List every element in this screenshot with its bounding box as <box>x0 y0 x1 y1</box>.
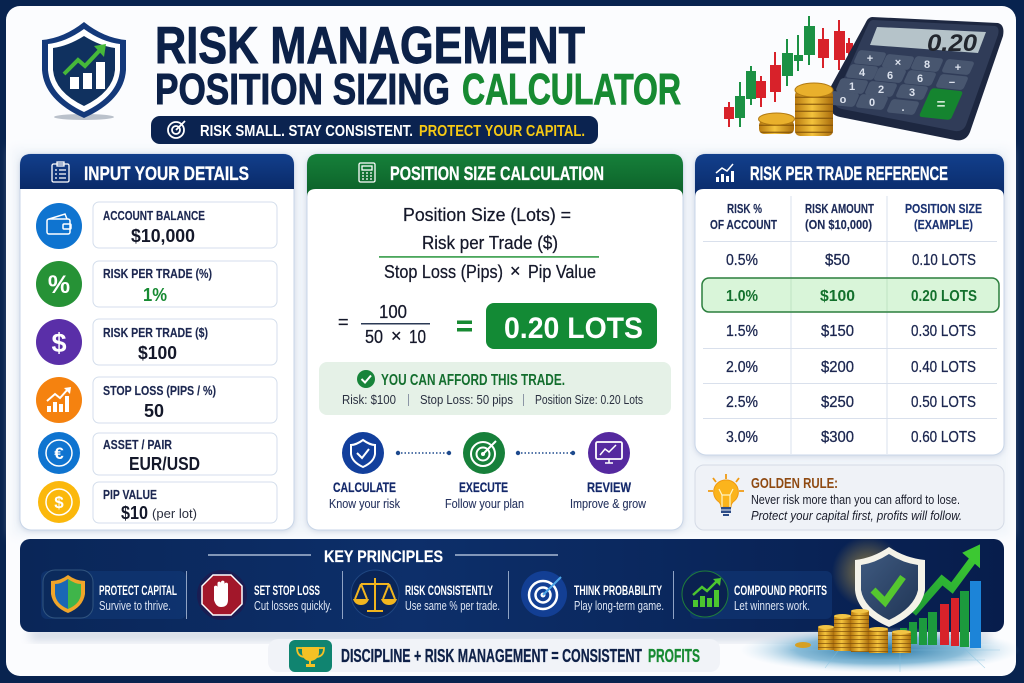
callout: affordability: YOU CAN AFFORD THIS TRADE. <box>381 372 565 389</box>
calculator key labels: 6 <box>887 70 893 82</box>
row: 0.5%: $50 <box>825 252 850 269</box>
row: 1.5%: $150 <box>821 323 854 340</box>
illustration: calculator <box>826 17 1003 140</box>
footer banner <box>268 639 720 672</box>
table header: (ON $10,000) <box>805 217 872 232</box>
panel header <box>20 154 294 189</box>
title: RISK MANAGEMENT <box>155 17 585 75</box>
row: 3.0%: $300 <box>821 429 854 446</box>
field: pip value: (per lot) <box>152 506 197 521</box>
panel: input your details <box>20 154 294 530</box>
worked calculation: = <box>338 312 349 332</box>
header logo: shield with growth chart <box>42 22 126 120</box>
row: 1.0% highlighted: 0.20 LOTS <box>911 288 977 305</box>
calculator key labels: = <box>937 96 946 113</box>
formula: Pip Value <box>528 262 596 282</box>
step: calculate: Know your risk <box>329 497 401 511</box>
panel: risk per trade reference <box>695 154 1004 455</box>
field: asset pair: € <box>54 444 64 463</box>
principle: protect capital: Survive to thrive. <box>99 598 171 613</box>
field: risk dollars: $ <box>51 328 67 358</box>
calculator keys <box>826 50 975 120</box>
callout: golden rule: GOLDEN RULE: <box>751 475 838 492</box>
panel header: POSITION SIZE CALCULATION <box>390 164 604 185</box>
calculator key labels: 3 <box>909 87 915 99</box>
row: 2.5%: $250 <box>821 394 854 411</box>
footer banner: DISCIPLINE + RISK MANAGEMENT = CONSISTENT <box>341 646 642 666</box>
callout: golden rule: Protect your capital first, profits will follow. <box>751 508 962 523</box>
step: review: REVIEW <box>587 480 631 495</box>
row: 1.0% highlighted: 1.0% <box>726 288 758 305</box>
worked calculation: 50 <box>365 327 383 347</box>
row: 2.0%: 2.0% <box>726 359 758 376</box>
icon: target <box>168 121 185 138</box>
table grid <box>703 196 997 454</box>
field: account balance <box>36 202 277 249</box>
worked calculation: 100 <box>379 302 407 322</box>
field: asset pair: EUR/USD <box>129 454 200 474</box>
principle: compound profits: COMPOUND PROFITS <box>734 583 827 598</box>
panel header: INPUT YOUR DETAILS <box>84 164 249 185</box>
calculator key labels: 8 <box>924 59 930 71</box>
field: stop loss <box>36 377 277 423</box>
field: pip value: PIP VALUE <box>103 487 157 502</box>
title: POSITION SIZING <box>155 65 450 114</box>
row: 3.0%: 0.60 LOTS <box>911 429 976 446</box>
step: calculate <box>329 432 401 511</box>
worked calculation: × <box>391 326 402 346</box>
step: review <box>570 432 647 511</box>
step: execute: EXECUTE <box>459 480 508 495</box>
callout: affordability: Stop Loss: 50 pips <box>420 393 513 407</box>
row: 2.5% <box>726 394 976 411</box>
result: 0.20 lots: 0.20 LOTS <box>504 312 643 345</box>
principle: compound profits <box>682 571 827 617</box>
row: 2.5%: 0.50 LOTS <box>911 394 976 411</box>
panel: key principles <box>20 539 1004 632</box>
step: calculate: CALCULATE <box>333 480 396 495</box>
row: 1.0% highlighted: $100 <box>820 288 855 305</box>
illustration: candlestick chart <box>724 16 853 127</box>
tagline pill: RISK SMALL. STAY CONSISTENT. <box>200 123 413 140</box>
field: risk dollars: $100 <box>138 343 177 363</box>
field: risk percent <box>36 261 277 307</box>
step: execute <box>445 432 524 511</box>
tagline pill <box>151 116 598 144</box>
step: review: Improve & grow <box>570 497 647 511</box>
row: 0.5%: 0.5% <box>726 252 758 269</box>
callout: affordability: Risk: $100 <box>342 393 396 407</box>
field: account balance: $10,000 <box>131 226 195 246</box>
table header: (EXAMPLE) <box>914 217 973 232</box>
calculator key labels: + <box>867 53 873 65</box>
formula: × <box>510 261 521 281</box>
principle: think probability: THINK PROBABILITY <box>574 583 662 598</box>
field: stop loss: STOP LOSS (PIPS / %) <box>103 383 216 398</box>
worked calculation: 10 <box>409 327 426 347</box>
row: 3.0% <box>726 429 976 446</box>
field: asset pair <box>38 432 277 475</box>
shield with check <box>855 547 925 627</box>
calculator key labels: 4 <box>859 67 866 79</box>
table header: POSITION SIZE <box>905 201 982 216</box>
calculator key labels: 6 <box>917 73 923 85</box>
row: 2.0% <box>726 359 976 376</box>
footer banner: PROFITS <box>648 646 700 666</box>
principle: risk consistently <box>351 570 500 618</box>
calculator display: 0.20 <box>927 30 978 57</box>
field: pip value: $ <box>54 493 64 512</box>
formula: Stop Loss (Pips) <box>384 262 503 282</box>
heading: KEY PRINCIPLES <box>324 547 443 566</box>
field: asset pair: ASSET / PAIR <box>103 437 172 452</box>
calculator key labels: × <box>895 57 901 69</box>
principle: set stop loss: SET STOP LOSS <box>254 583 320 598</box>
formula <box>379 205 599 282</box>
row: 2.0%: $200 <box>821 359 854 376</box>
arrow: execute to review <box>516 451 575 455</box>
principle: protect capital <box>43 570 177 618</box>
field: risk dollars: RISK PER TRADE ($) <box>103 325 208 340</box>
coin stacks <box>795 609 911 653</box>
calculator key labels: 1 <box>849 81 855 93</box>
principle: protect capital: PROTECT CAPITAL <box>99 583 177 598</box>
reflective floor <box>740 627 1020 673</box>
principle: think probability <box>521 571 664 617</box>
principle: set stop loss <box>197 570 332 620</box>
calculator key labels <box>840 53 961 114</box>
panel header <box>695 154 1004 197</box>
row: 1.0% highlighted <box>702 278 999 312</box>
illustration: shield, coins and rising chart <box>740 536 1020 673</box>
worked calculation <box>338 302 472 347</box>
row: 2.5%: 2.5% <box>726 394 758 411</box>
principle: think probability: Play long-term game. <box>574 598 664 613</box>
green arrow <box>913 557 975 613</box>
table header: RISK AMOUNT <box>805 201 874 216</box>
principle: risk consistently: RISK CONSISTENTLY <box>405 583 493 598</box>
calculator key labels: . <box>901 102 905 114</box>
row: 0.5% <box>726 252 976 269</box>
row: 1.5%: 0.30 LOTS <box>911 323 976 340</box>
field: risk percent: % <box>48 271 70 299</box>
field: pip value: $10 <box>121 503 148 523</box>
table header: OF ACCOUNT <box>710 217 777 232</box>
formula: Position Size (Lots) = <box>403 205 571 225</box>
bottom shadow under principles band <box>30 630 990 640</box>
step: execute: Follow your plan <box>445 497 524 511</box>
result: 0.20 lots <box>486 303 657 349</box>
panel header <box>307 154 683 197</box>
row: 2.0%: 0.40 LOTS <box>911 359 976 376</box>
formula: Risk per Trade ($) <box>422 233 558 253</box>
tagline pill: PROTECT YOUR CAPITAL. <box>419 123 585 140</box>
row: 0.5%: 0.10 LOTS <box>912 252 976 269</box>
field: pip value <box>38 481 277 523</box>
principle: compound profits: Let winners work. <box>734 598 810 613</box>
calculator display <box>870 27 986 57</box>
illustration: gold coin stacks <box>758 83 833 136</box>
calculator key labels: + <box>955 62 961 74</box>
field: risk percent: 1% <box>143 285 167 305</box>
calculator key labels: − <box>949 77 955 89</box>
table header: RISK % <box>727 201 762 216</box>
callout: golden rule <box>695 465 1004 530</box>
field: stop loss: 50 <box>144 401 164 421</box>
table header <box>710 201 982 232</box>
row: 1.5% <box>726 323 976 340</box>
callout: affordability: Position Size: 0.20 Lots <box>535 393 643 407</box>
icon: light bulb <box>708 474 744 516</box>
principle: set stop loss: Cut losses quickly. <box>254 598 332 613</box>
field: risk percent: RISK PER TRADE (%) <box>103 266 212 281</box>
chart bars <box>900 581 981 648</box>
calculator key labels: 2 <box>878 84 884 96</box>
row: 1.5%: 1.5% <box>726 323 758 340</box>
callout: golden rule: Never risk more than you can afford to lose. <box>751 492 960 507</box>
calculator key labels: 0 <box>869 97 875 109</box>
calculator key labels: o <box>840 94 847 106</box>
panel: position size calculation <box>307 154 683 530</box>
icon: trophy <box>289 640 332 672</box>
arrow: calculate to execute <box>396 451 451 455</box>
field: risk dollars <box>36 319 277 365</box>
principle: risk consistently: Use same % per trade. <box>405 598 500 613</box>
title <box>155 17 681 114</box>
title: CALCULATOR <box>462 65 681 114</box>
field: account balance: ACCOUNT BALANCE <box>103 208 205 223</box>
row: 3.0%: 3.0% <box>726 429 758 446</box>
callout: affordability <box>319 362 671 415</box>
